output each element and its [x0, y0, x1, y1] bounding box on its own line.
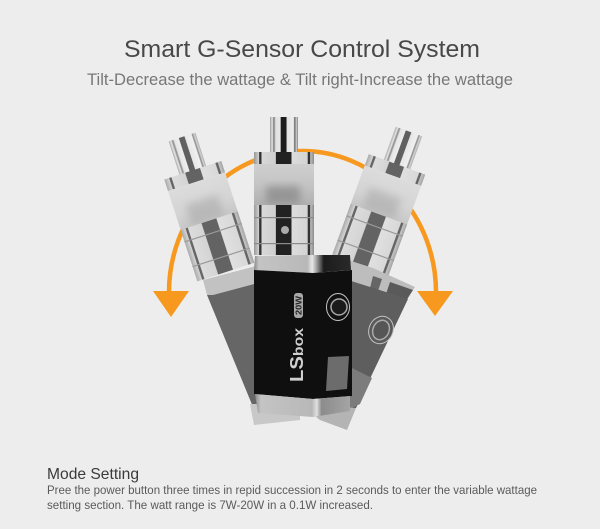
bottom metal — [250, 404, 300, 425]
tank — [153, 128, 254, 281]
tank cap — [270, 117, 298, 153]
gray body — [348, 280, 408, 415]
device: tilted right — [300, 121, 437, 430]
tank collar — [254, 152, 314, 164]
bottom metal — [300, 404, 356, 430]
metal collar — [203, 266, 258, 295]
box body — [254, 270, 352, 399]
tank — [332, 121, 437, 275]
wattage badge — [294, 293, 304, 318]
text block: mode setting description: setting section. The watt range is 7W-20W in a 0.1W increased. — [47, 498, 373, 512]
icon: tank logo — [281, 226, 289, 234]
brand label: LSbox — [287, 328, 307, 382]
icon: tilted power button — [364, 312, 398, 348]
screen — [326, 356, 349, 391]
bottom metal cap — [255, 394, 350, 417]
device: center upright — [254, 117, 352, 417]
heading: mode setting: Mode Setting — [47, 466, 139, 483]
metal collar — [348, 260, 415, 300]
tank glass — [254, 164, 314, 205]
wattage badge: 20W — [294, 295, 304, 315]
tank metal base — [254, 205, 314, 255]
tilted screen — [348, 366, 372, 410]
title: Smart G-Sensor Control System — [124, 36, 480, 63]
device: tilted left — [153, 128, 300, 425]
icon: power button — [326, 294, 350, 320]
subtitle: Tilt-Decrease the wattage & Tilt right-Increase the wattage — [87, 70, 513, 89]
arrow: orange tilt arc — [153, 151, 453, 317]
gray body — [207, 283, 258, 407]
text block: mode setting description: Pree the power button three times in repid succession in 2 seconds to enter the variable wattage — [47, 483, 537, 497]
text block: mode setting description — [47, 483, 537, 512]
collar dark stripes — [370, 276, 382, 291]
top metal cap — [254, 255, 351, 273]
